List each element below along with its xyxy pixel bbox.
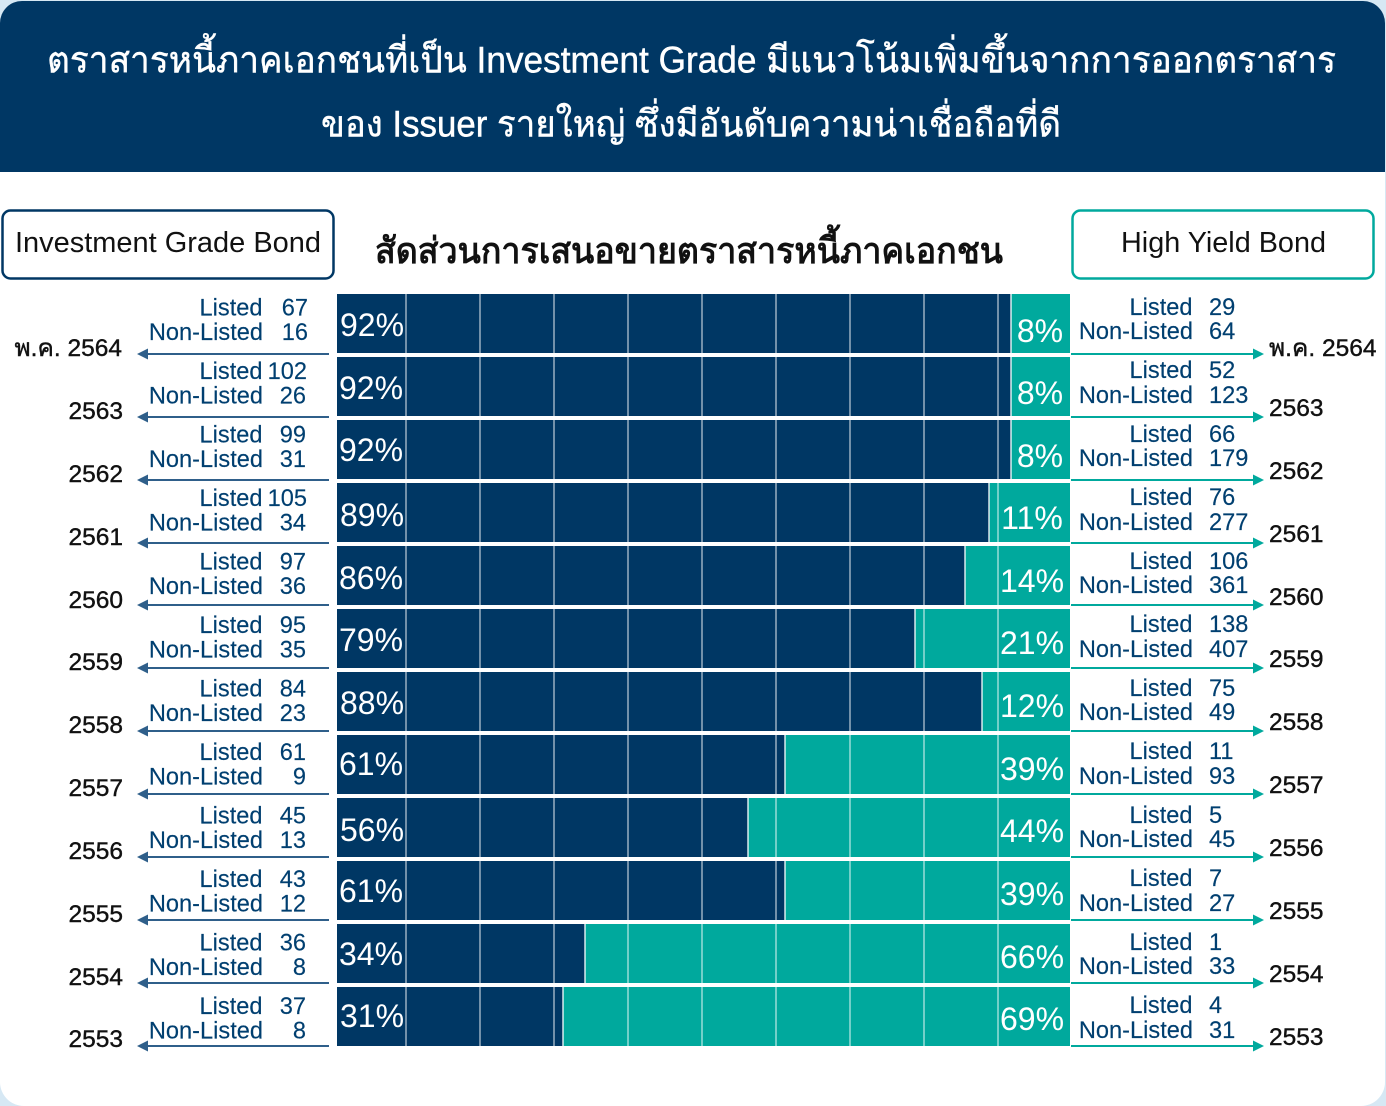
high yield issuer counts: Listed [1130,866,1192,892]
left year labels: 2555 [68,901,123,928]
high yield issuer counts: 361 [1209,573,1248,599]
high yield issuer counts: Listed [1130,358,1192,384]
high yield percentages: 14% [1000,563,1064,599]
high yield issuer counts [1079,295,1248,1044]
high yield issuer counts: Listed [1130,612,1192,638]
investment grade issuer counts: Listed [200,676,262,702]
high yield issuer counts: Listed [1130,930,1192,956]
investment grade issuer counts: 26 [280,384,306,410]
legend box: High Yield Bond: High Yield Bond [1121,227,1326,259]
high yield issuer counts: Listed [1130,295,1192,321]
investment grade issuer counts: Non-Listed [149,638,263,664]
left year labels [15,335,123,1053]
right arrows [1071,348,1264,1052]
investment grade issuer counts: 95 [280,613,306,639]
high yield percentages: 12% [1000,688,1064,724]
investment grade percentages: 31% [340,998,404,1034]
high yield issuer counts: 4 [1209,993,1222,1019]
investment grade issuer counts: 36 [280,930,306,956]
investment grade issuer counts: 105 [268,486,307,512]
legend box: Investment Grade Bond: Investment Grade Bond [15,227,321,259]
high yield percentages: 66% [1000,939,1064,975]
right year labels: 2554 [1269,961,1324,988]
high yield issuer counts: Listed [1130,676,1192,702]
high yield percentages: 11% [1001,500,1063,536]
high yield issuer counts: Non-Listed [1079,891,1193,917]
left year labels: พ.ค. 2564 [15,335,122,362]
investment grade issuer counts: Non-Listed [149,320,263,346]
high yield issuer counts: 407 [1209,637,1248,663]
high yield issuer counts: Non-Listed [1079,700,1193,726]
investment grade issuer counts: 31 [280,447,306,473]
investment grade percentages: 92% [339,432,403,468]
investment grade issuer counts: Listed [200,867,262,893]
investment grade issuer counts: Listed [200,804,262,830]
investment grade issuer counts: Non-Listed [149,1018,263,1044]
investment grade issuer counts: 8 [293,955,306,981]
left year labels: 2561 [68,524,123,551]
investment grade issuer counts: 13 [280,828,306,854]
investment grade issuer counts: Non-Listed [149,764,263,790]
high yield issuer counts: Non-Listed [1079,764,1193,790]
investment grade issuer counts: 16 [282,320,308,346]
left year labels: 2553 [68,1026,123,1053]
high yield issuer counts: Listed [1130,993,1192,1019]
high yield issuer counts: 179 [1209,446,1248,472]
high yield issuer counts: 7 [1209,866,1222,892]
headline line 1: ตราสารหนี้ภาคเอกชนที่เป็น Investment Grade มีแนวโน้มเพิ่มขึ้นจากการออกตราสาร [47,32,1336,80]
high yield issuer counts: Listed [1130,549,1192,575]
high yield issuer counts: Non-Listed [1079,383,1193,409]
high yield issuer counts: Non-Listed [1079,954,1193,980]
investment grade issuer counts: Non-Listed [149,384,263,410]
investment grade issuer counts: 45 [280,804,306,830]
investment grade percentages [339,307,404,1034]
chart title: สัดส่วนการเสนอขายตราสารหนี้ภาคเอกชน [375,224,1003,271]
investment grade issuer counts: Non-Listed [149,447,263,473]
investment grade issuer counts: 37 [280,994,306,1020]
high yield percentages: 8% [1017,313,1063,349]
high yield issuer counts: 93 [1209,764,1235,790]
investment grade issuer counts: Non-Listed [149,510,263,536]
high yield issuer counts: 76 [1209,485,1235,511]
investment grade issuer counts [149,296,308,1044]
investment grade issuer counts: 84 [280,676,306,702]
investment grade issuer counts: 12 [280,892,306,918]
high yield percentages: 39% [1000,876,1064,912]
high yield percentages: 44% [1000,813,1064,849]
high yield issuer counts: 45 [1209,827,1235,853]
investment grade issuer counts: 61 [280,740,306,766]
high yield issuer counts: 277 [1209,510,1248,536]
high yield issuer counts: Listed [1130,485,1192,511]
left year labels: 2559 [68,649,123,676]
investment grade issuer counts: 34 [280,510,306,536]
legend box: High Yield Bond [1072,210,1374,278]
investment grade issuer counts: 43 [280,867,306,893]
right year labels: 2562 [1269,458,1324,485]
left year labels: 2558 [68,712,123,739]
high yield percentages: 21% [1000,625,1064,661]
high yield issuer counts: Non-Listed [1079,319,1193,345]
high yield issuer counts: Non-Listed [1079,637,1193,663]
high yield percentages: 69% [1000,1001,1064,1037]
left year labels: 2562 [68,461,123,488]
high yield issuer counts: Non-Listed [1079,573,1193,599]
high yield issuer counts: 64 [1209,319,1235,345]
investment grade issuer counts: Non-Listed [149,828,263,854]
right year labels: 2557 [1269,772,1324,799]
high yield issuer counts: 49 [1209,700,1235,726]
header banner [0,1,1385,172]
investment grade issuer counts: 102 [268,359,307,385]
high yield issuer counts: Listed [1130,739,1192,765]
high yield issuer counts: Non-Listed [1079,510,1193,536]
right year labels: 2561 [1269,521,1324,548]
investment grade percentages: 92% [339,370,403,406]
right year labels: 2563 [1269,395,1324,422]
right year labels: 2559 [1269,646,1324,673]
high yield percentages: 8% [1017,375,1063,411]
right year labels: พ.ค. 2564 [1269,335,1376,362]
right year labels: 2556 [1269,835,1324,862]
stacked bar chart [337,294,1070,1046]
investment grade percentages: 61% [339,746,403,782]
investment grade issuer counts: Listed [200,296,262,322]
high yield percentages: 39% [1000,751,1064,787]
investment grade percentages: 86% [339,560,403,596]
investment grade issuer counts: 8 [293,1018,306,1044]
investment grade issuer counts: Non-Listed [149,892,263,918]
investment grade issuer counts: Listed [200,994,262,1020]
left year labels: 2563 [68,398,123,425]
high yield issuer counts: Listed [1130,803,1192,829]
legend box: Investment Grade Bond [2,210,334,278]
investment grade issuer counts: Listed [200,740,262,766]
right year labels: 2558 [1269,709,1324,736]
investment grade issuer counts: 35 [280,638,306,664]
high yield issuer counts: Non-Listed [1079,827,1193,853]
investment grade issuer counts: 97 [280,550,306,576]
investment grade issuer counts: 36 [280,574,306,600]
high yield issuer counts: 66 [1209,422,1235,448]
investment grade issuer counts: 99 [280,422,306,448]
left arrows [137,348,329,1052]
investment grade percentages: 79% [339,622,403,658]
investment grade issuer counts: Listed [200,930,262,956]
high yield issuer counts: Non-Listed [1079,1018,1193,1044]
high yield issuer counts: 106 [1209,549,1248,575]
high yield percentages: 8% [1017,438,1063,474]
investment grade issuer counts: Non-Listed [149,701,263,727]
high yield issuer counts: 5 [1209,803,1222,829]
investment grade issuer counts: Listed [200,486,262,512]
investment grade percentages: 61% [339,873,403,909]
high yield issuer counts: 27 [1209,891,1235,917]
high yield issuer counts: Non-Listed [1079,446,1193,472]
right year labels [1269,335,1376,1051]
investment grade issuer counts: 67 [282,296,308,322]
investment grade issuer counts: 9 [293,764,306,790]
right year labels: 2560 [1269,584,1324,611]
investment grade issuer counts: Listed [200,550,262,576]
left year labels: 2560 [68,587,123,614]
investment grade issuer counts: Non-Listed [149,955,263,981]
investment grade issuer counts: Listed [200,359,262,385]
left year labels: 2557 [68,775,123,802]
investment grade issuer counts: Listed [200,613,262,639]
investment grade percentages: 92% [340,307,404,343]
high yield issuer counts: 75 [1209,676,1235,702]
high yield issuer counts: 138 [1209,612,1248,638]
investment grade issuer counts: Listed [200,422,262,448]
right year labels: 2555 [1269,898,1324,925]
investment grade issuer counts: 23 [280,701,306,727]
left year labels: 2554 [68,964,123,991]
high yield percentages [1000,313,1064,1037]
investment grade issuer counts: Non-Listed [149,574,263,600]
right year labels: 2553 [1269,1024,1324,1051]
high yield issuer counts: 29 [1209,295,1235,321]
investment grade percentages: 89% [340,497,404,533]
investment grade percentages: 88% [340,685,404,721]
high yield issuer counts: Listed [1130,422,1192,448]
headline line 2: ของ Issuer รายใหญ่ ซึ่งมีอันดับความน่าเชื่อถือที่ดี [321,98,1061,146]
high yield issuer counts: 31 [1209,1018,1235,1044]
high yield issuer counts: 33 [1209,954,1235,980]
high yield issuer counts: 52 [1209,358,1235,384]
investment grade percentages: 56% [340,812,404,848]
investment grade percentages: 34% [339,936,403,972]
high yield issuer counts: 123 [1209,383,1248,409]
high yield issuer counts: 1 [1209,930,1222,956]
left year labels: 2556 [68,838,123,865]
high yield issuer counts: 11 [1209,739,1234,765]
